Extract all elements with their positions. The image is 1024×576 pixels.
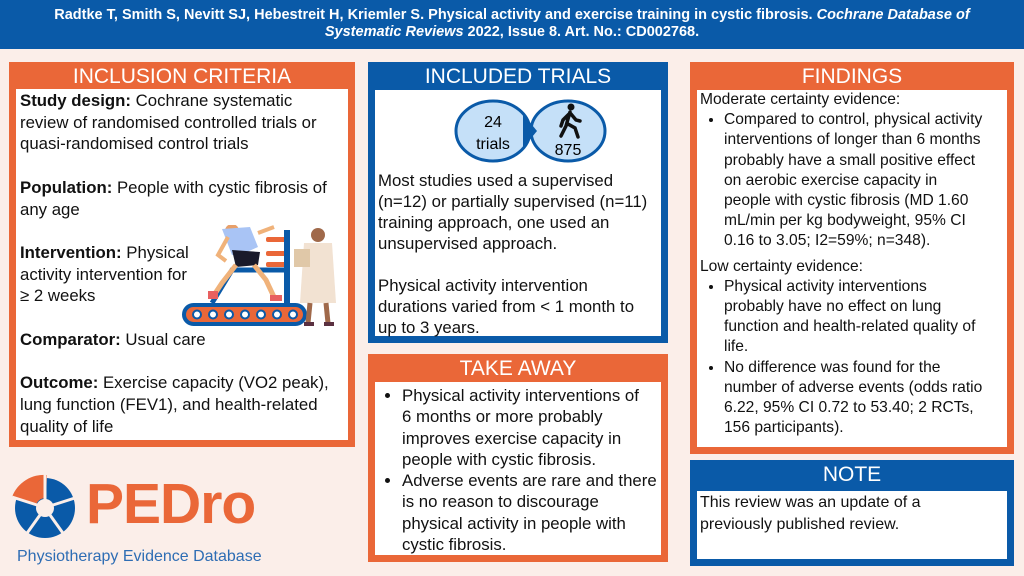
text: supervision: (n=12) or partially supervised (n=11) <box>378 192 647 211</box>
text: study design <box>20 91 317 153</box>
text: intervention: activity intervention for <box>20 265 187 284</box>
panel: findings: on aerobic exercise capacity in <box>724 172 937 189</box>
text: supervision: training approach, one used an <box>378 213 609 232</box>
text: supervision <box>378 171 647 253</box>
panel: findings: function and health-related quality of <box>724 318 975 335</box>
text: note: previously published review. <box>700 516 899 533</box>
text: note <box>700 494 921 533</box>
panel: findings: 156 participants). <box>724 419 844 436</box>
text: durations <box>378 276 634 337</box>
text: supervision: Most studies used a supervised <box>378 171 613 190</box>
heading: included trials: INCLUDED TRIALS <box>425 65 611 88</box>
panel: findings: people with cystic fibrosis (MD 1.60 <box>724 192 968 209</box>
text: Physiotherapy Evidence Database: Physiotherapy Evidence Database <box>17 548 262 565</box>
header citation: Radtke T, Smith S, Nevitt SJ, Hebestreit H, Kriemler S. Physical activity and exercise training in cystic fibrosis. Cochrane Database of <box>54 7 970 23</box>
text: outcome: quality of life <box>20 417 113 436</box>
panel: findings: Compared to control, physical activity <box>724 111 982 128</box>
text: note: This review was an update of a <box>700 494 921 511</box>
text: intervention <box>20 243 189 305</box>
panel: findings: 0.16 to 3.05; I2=59%; n=348). <box>724 232 930 249</box>
text: intervention: Intervention: Physical <box>20 243 189 262</box>
list: take away points: 6 months or more probably <box>402 407 603 426</box>
text: population: any age <box>20 200 80 219</box>
heading: take away: TAKE AWAY <box>460 357 576 380</box>
heading: note: NOTE <box>823 463 881 486</box>
list: take away points: Adverse events are rare and there <box>402 471 657 490</box>
text: durations: Physical activity intervention <box>378 276 588 295</box>
panel: findings: No difference was found for the <box>724 359 940 376</box>
header citation <box>0 0 1024 49</box>
panel: findings: Physical activity interventions <box>724 278 927 295</box>
text: intervention: ≥ 2 weeks <box>20 286 95 305</box>
text: moderate certainty: Moderate certainty evidence: <box>700 91 900 108</box>
text: comparator: Comparator: Usual care <box>20 330 206 349</box>
text: study design: review of randomised controlled trials or <box>20 113 317 132</box>
list: take away points: physical activity in people with <box>402 514 626 533</box>
panel: take away <box>368 354 668 562</box>
text: outcome <box>20 373 329 436</box>
panel: findings: probably have a small positive effect <box>724 152 975 169</box>
text: low certainty: Low certainty evidence: <box>700 258 863 275</box>
list: take away points <box>385 386 657 554</box>
panel: findings: probably have no effect on lung <box>724 298 941 315</box>
panel: findings: mL/min per kg bodyweight, 95% CI <box>724 212 966 229</box>
list: take away points: cystic fibrosis. <box>402 535 506 554</box>
panel: included trials <box>368 62 668 343</box>
header citation: Systematic Reviews 2022, Issue 8. Art. No.: CD002768. <box>325 24 699 40</box>
list: take away points: improves exercise capacity in <box>402 429 621 448</box>
logo: PEDro <box>12 472 262 565</box>
panel: findings: interventions of longer than 6 months <box>724 131 981 148</box>
heading: inclusion criteria: INCLUSION CRITERIA <box>73 65 291 88</box>
text: population: Population: People with cystic fibrosis of <box>20 178 327 197</box>
panel: findings <box>690 62 1014 454</box>
list: take away points: is no reason to discourage <box>402 492 599 511</box>
icon: PEDro wheel <box>12 474 75 538</box>
text: outcome: lung function (FEV1), and health-related <box>20 395 318 414</box>
icon: trials and participants circles: 24 <box>484 114 502 131</box>
text: outcome: Outcome: Exercise capacity (VO2 peak), <box>20 373 329 392</box>
heading: findings: FINDINGS <box>802 65 902 88</box>
panel: note <box>690 460 1014 566</box>
panel: findings: 6.22, 95% CI 0.72 to 53.40; 2 RCTs, <box>724 399 974 416</box>
icon: trials and participants circles <box>454 100 606 162</box>
panel: inclusion criteria <box>9 62 355 447</box>
text: population <box>20 178 327 219</box>
icon: trials and participants circles: trials <box>476 136 510 153</box>
list: take away points: Physical activity interventions of <box>402 386 639 405</box>
text: durations: up to 3 years. <box>378 318 480 337</box>
panel: findings: number of adverse events (odds ratio <box>724 379 982 396</box>
text: study design: Study design: Cochrane systematic <box>20 91 292 110</box>
text: durations: durations varied from < 1 month to <box>378 297 634 316</box>
text: study design: quasi-randomised control trials <box>20 134 249 153</box>
icon: treadmill illustration <box>182 225 336 326</box>
list: take away points: people with cystic fibrosis. <box>402 450 596 469</box>
icon: trials and participants circles: 875 <box>555 142 581 159</box>
panel: findings: life. <box>724 338 748 355</box>
text: supervision: unsupervised approach. <box>378 234 557 253</box>
text: PEDro: PEDro <box>86 472 255 536</box>
